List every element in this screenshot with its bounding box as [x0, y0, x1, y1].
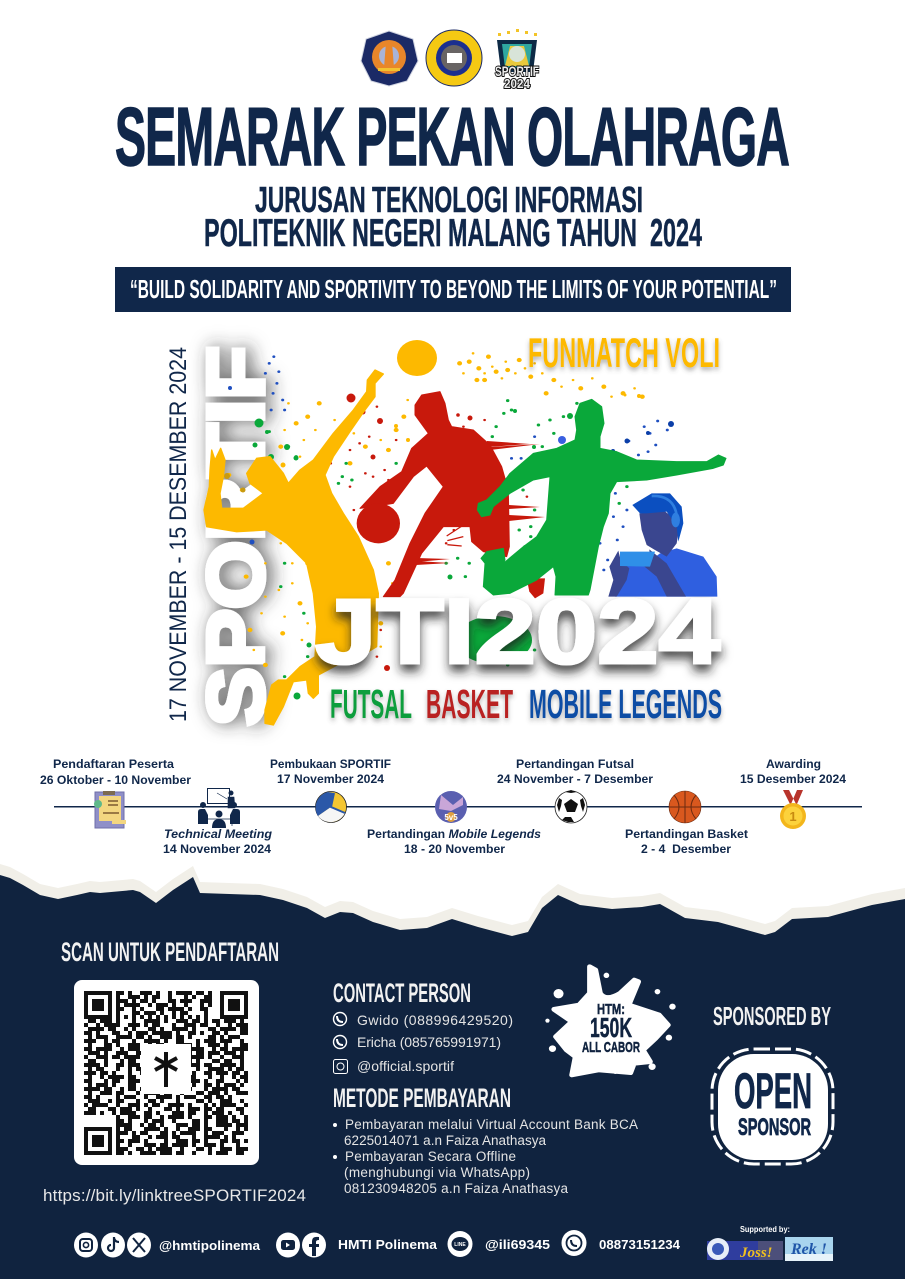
icon: whatsapp — [334, 1012, 346, 1026]
logo: Polinema shield — [361, 31, 418, 86]
torn edge cream outline — [0, 864, 905, 1279]
timeline labels: Pertandingan Mobile Legends — [367, 829, 541, 841]
QR code — [74, 980, 259, 1165]
icon: basketball — [669, 791, 701, 823]
icon: clipboard — [94, 791, 126, 828]
payment list: 6225014071 a.n Faiza Anathasya — [344, 1133, 546, 1148]
social footer: HMTI Polinema — [338, 1237, 438, 1252]
figure: footballer green — [477, 399, 726, 595]
icon: line: LINE — [454, 1242, 466, 1248]
timeline labels: Awarding — [766, 759, 821, 771]
HTM price splash — [545, 967, 676, 1075]
timeline labels: 26 Oktober - 10 November — [40, 775, 192, 787]
icon: medal — [780, 790, 806, 829]
supporter logos — [707, 1225, 833, 1261]
QR center logo — [141, 1044, 191, 1094]
social footer: @ili69345 — [485, 1237, 550, 1252]
icon: mobile legends 5v5 — [435, 791, 467, 823]
large paint drops — [224, 386, 674, 700]
open sponsor badge — [712, 1049, 833, 1164]
icon: technical meeting — [198, 788, 240, 828]
event dates vertical: 17 NOVEMBER - 15 DESEMBER 2024 — [165, 347, 192, 722]
HTM price splash: 150K — [590, 1012, 632, 1043]
sport labels: BASKET — [426, 681, 513, 727]
contact person heading: CONTACT PERSON — [333, 978, 471, 1008]
logo: Sportif 2024: SPORTIF — [495, 63, 539, 79]
contact list: Gwido (088996429520) — [357, 1012, 513, 1028]
icons: youtube, facebook — [276, 1232, 326, 1258]
timeline labels: 2 - 4 Desember — [641, 844, 732, 856]
logo: Joss: Joss! — [739, 1245, 773, 1261]
tagline banner — [115, 267, 791, 312]
open sponsor badge: SPONSOR — [738, 1114, 811, 1141]
icon: instagram — [334, 1060, 348, 1074]
title: SEMARAK PEKAN OLAHRAGA — [115, 91, 790, 184]
timeline labels: 15 Desember 2024 — [740, 774, 847, 786]
timeline labels: 18 - 20 November — [404, 844, 506, 856]
icon: soccer ball — [555, 790, 587, 823]
payment list: Pembayaran Secara Offline — [345, 1149, 516, 1164]
registration link: https://bit.ly/linktreeSPORTIF2024 — [43, 1186, 306, 1205]
logos row — [361, 29, 539, 91]
volleyball — [397, 340, 437, 376]
contact list: @official.sportif — [357, 1058, 454, 1074]
timeline labels: Technical Meeting — [164, 829, 272, 841]
paint splatter — [229, 353, 667, 677]
JTI2024 wordmark: JTI2024 — [315, 581, 720, 683]
payment list: 081230948205 a.n Faiza Anathasya — [344, 1181, 568, 1196]
open sponsor badge: OPEN — [734, 1063, 812, 1119]
payment heading: METODE PEMBAYARAN — [333, 1083, 511, 1113]
payment list — [333, 1117, 638, 1196]
sport labels — [330, 681, 722, 727]
icon: volleyball — [316, 792, 346, 822]
QR finder patterns — [84, 991, 248, 1155]
timeline labels — [40, 759, 847, 856]
supporter logos: Supported by: — [740, 1225, 790, 1234]
payment list: Pembayaran melalui Virtual Account Bank BCA — [345, 1117, 638, 1132]
subtitle — [204, 179, 702, 255]
icons: instagram, tiktok, x — [74, 1232, 151, 1258]
footer panel with torn edge — [0, 864, 905, 1279]
icon: whatsapp — [334, 1036, 346, 1048]
SPORTIF vertical wordmark: SPORTIF — [191, 346, 280, 726]
social footer — [74, 1230, 681, 1258]
registration heading: SCAN UNTUK PENDAFTARAN — [61, 937, 279, 967]
HTM price splash: HTM: — [597, 1001, 625, 1018]
subtitle: JURUSAN TEKNOLOGI INFORMASI — [255, 179, 643, 220]
icon: whatsapp — [562, 1230, 586, 1256]
social footer: 08873151234 — [599, 1237, 681, 1252]
timeline labels: 24 November - 7 Desember — [497, 774, 654, 786]
sport labels: FUTSAL — [330, 681, 412, 727]
logo: Sportif 2024: 2024 — [504, 76, 531, 91]
icon: medal: 1 — [789, 809, 797, 824]
figure: mobile gamer — [608, 493, 717, 597]
sport labels: MOBILE LEGENDS — [529, 681, 722, 727]
timeline labels: Pertandingan Basket — [625, 829, 748, 841]
payment list: (menghubungi via WhatsApp) — [344, 1165, 530, 1180]
timeline labels: 14 November 2024 — [163, 844, 272, 856]
timeline labels: 17 November 2024 — [277, 774, 385, 786]
figure: volleyball player yellow — [204, 370, 383, 725]
contact list — [334, 1012, 513, 1074]
icon: line — [448, 1231, 472, 1257]
logo: Rek: Rek ! — [790, 1241, 827, 1258]
HTM price splash: ALL CABOR — [582, 1039, 640, 1056]
logo: HMTI — [426, 30, 482, 86]
timeline labels: Pertandingan Futsal — [516, 759, 634, 771]
contact list: Ericha (085765991971) — [357, 1034, 501, 1050]
timeline labels: Pembukaan SPORTIF — [270, 759, 391, 771]
speed lines — [416, 441, 545, 565]
timeline labels: Pendaftaran Peserta — [53, 759, 175, 771]
label: Funmatch Voli: FUNMATCH VOLI — [528, 329, 720, 376]
social footer: @hmtipolinema — [159, 1238, 261, 1253]
timeline — [40, 759, 862, 856]
green ball behind wordmark — [456, 616, 532, 664]
navy panel — [0, 875, 905, 1279]
sports illustration — [204, 340, 726, 725]
logo: Sportif 2024 — [495, 29, 539, 91]
icon: mobile legends 5v5: 5v5 — [444, 813, 458, 822]
figure: basketball player red — [357, 392, 509, 597]
